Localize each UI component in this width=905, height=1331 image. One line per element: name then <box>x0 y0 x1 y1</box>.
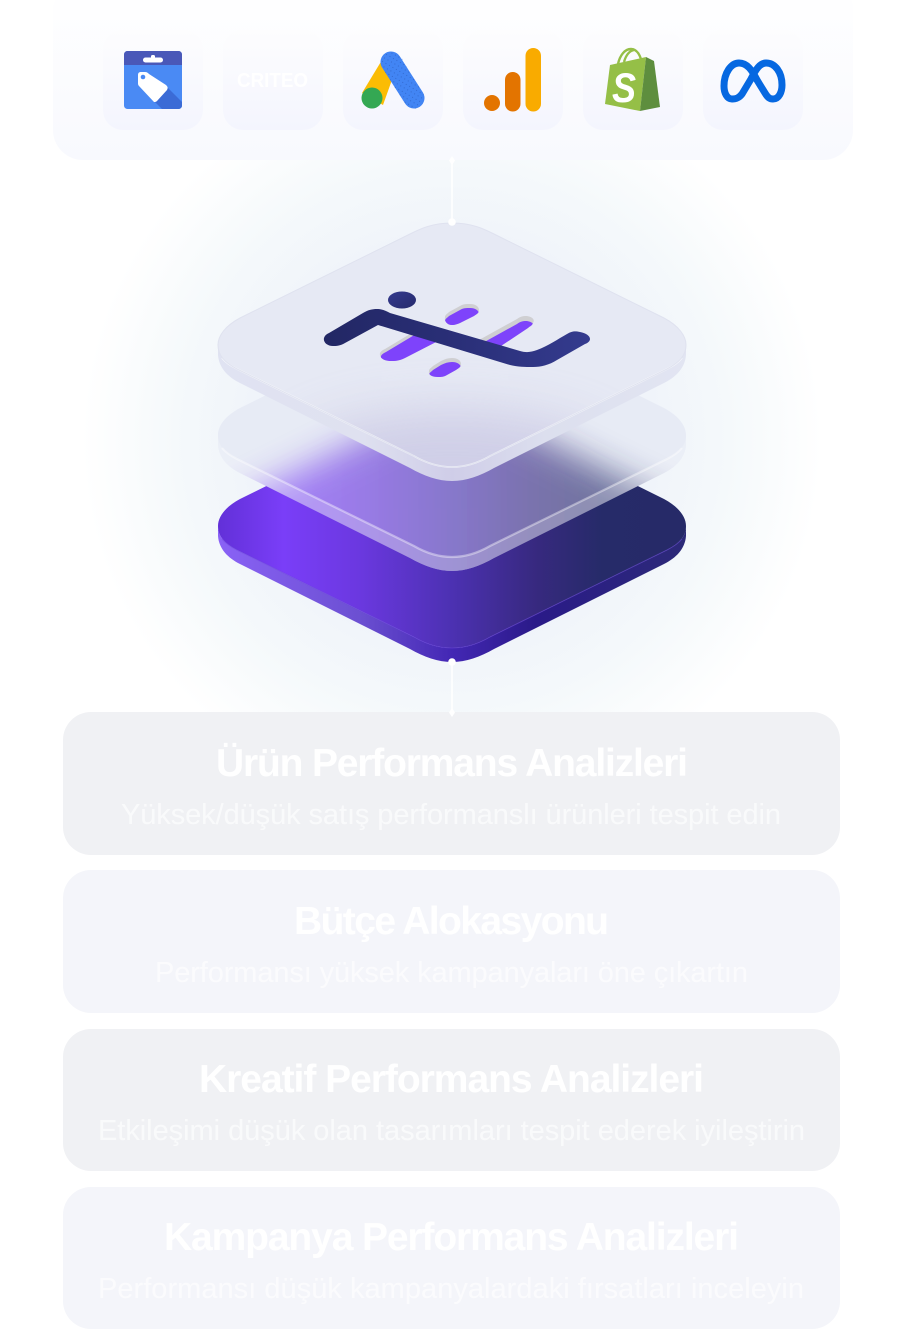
tile: Google Ads <box>362 52 424 108</box>
panel: integrations <box>103 48 803 130</box>
layer: top plate <box>218 222 686 481</box>
card: Ürün Performans Analizleri: Yüksek/düşük satış performanslı ürünleri tespit edin <box>121 799 781 831</box>
card: Kampanya Performans Analizleri: Kampanya Performans Analizleri <box>164 1216 739 1259</box>
card: Ürün Performans Analizleri: Ürün Performans Analizleri <box>216 742 688 785</box>
layer: bottom plate <box>218 404 686 662</box>
card: Kreatif Performans Analizleri: Etkileşimi düşük olan tasarımları tespit ederek iyileştirin <box>98 1115 805 1147</box>
background glow <box>82 70 822 810</box>
logo: slots <box>380 304 534 377</box>
card: Kampanya Performans Analizleri: Performansı düşük kampanyalardaki fırsatları inceleyin <box>98 1273 804 1305</box>
card: Kampanya Performans Analizleri <box>63 1187 840 1329</box>
card: Kreatif Performans Analizleri: Kreatif Performans Analizleri <box>199 1058 704 1101</box>
tile: Criteo <box>223 30 323 130</box>
connector: top <box>449 156 455 222</box>
card: Kreatif Performans Analizleri <box>63 1029 840 1171</box>
connector diamond <box>449 708 455 717</box>
logo: dot <box>388 292 416 308</box>
card: Ürün Performans Analizleri <box>63 712 840 855</box>
logo: ribbon <box>324 309 590 367</box>
tile: Criteo: CRITEO <box>237 70 308 92</box>
tile: Shopify <box>583 30 683 130</box>
tile: Google Merchant <box>103 30 203 130</box>
tile: Meta <box>703 30 803 130</box>
tile: Google Analytics <box>463 30 563 130</box>
card: Bütçe Alokasyonu: Performansı yüksek kampanyaları öne çıkartın <box>155 957 748 989</box>
card: Bütçe Alokasyonu <box>63 870 840 1013</box>
connector: bottom <box>448 658 456 712</box>
tile: Shopify: S <box>612 64 636 111</box>
connector node: top plate <box>448 218 456 226</box>
layer: middle glass plate <box>218 396 686 571</box>
card: Bütçe Alokasyonu: Bütçe Alokasyonu <box>294 900 609 943</box>
